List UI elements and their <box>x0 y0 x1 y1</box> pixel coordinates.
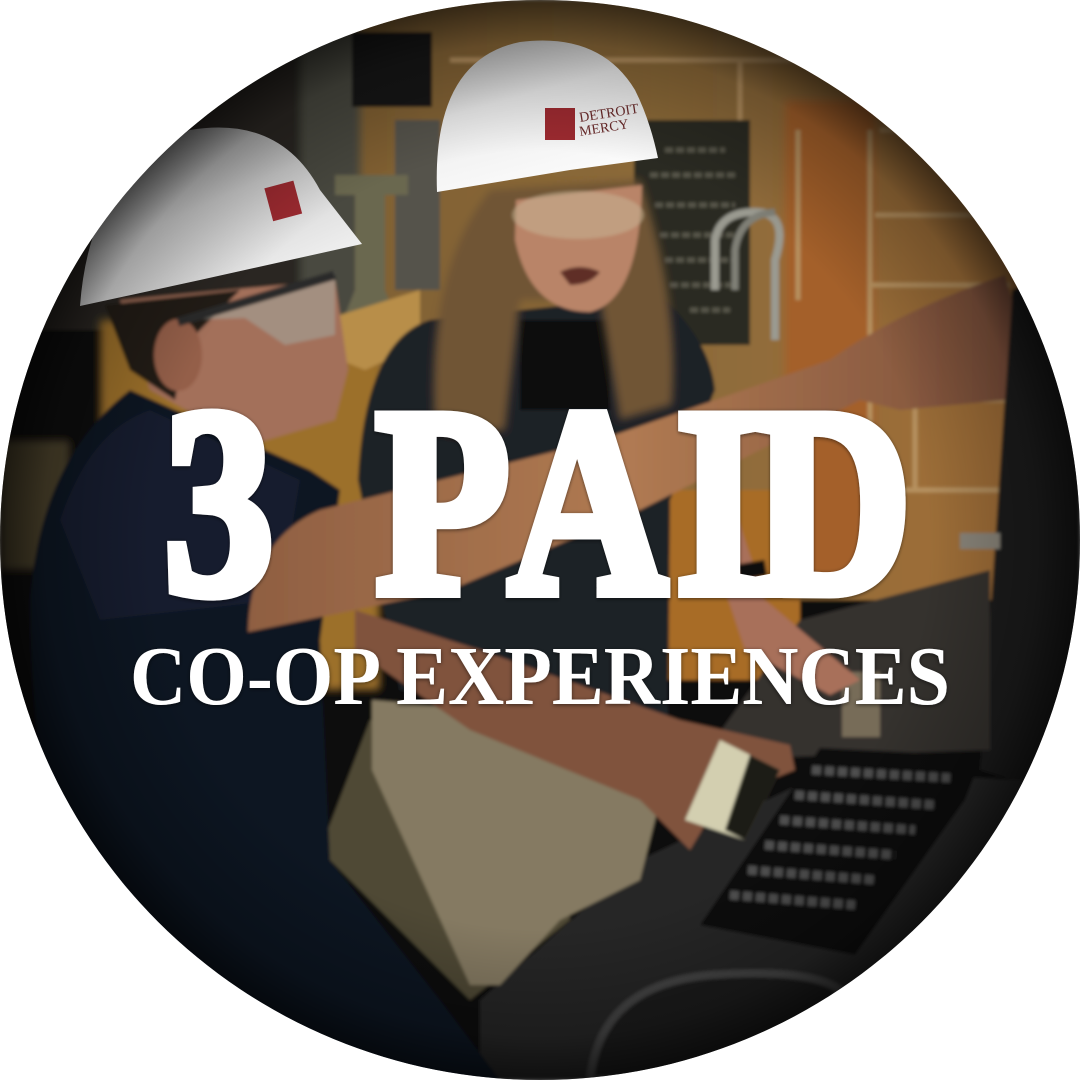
logo: Detroit Mercy: MERCY <box>578 117 630 140</box>
photo: right monitor and desk <box>480 260 1080 1080</box>
subheading: CO-OP EXPERIENCES: CO-OP EXPERIENCES <box>130 630 950 723</box>
person: male student <box>30 272 500 1080</box>
icon: tape measure in hand <box>685 740 780 840</box>
person: woman student <box>320 180 860 1000</box>
logo: Detroit Mercy: DETROIT <box>578 102 640 126</box>
icon: man's white hard hat <box>80 128 362 306</box>
plaque <box>634 120 750 345</box>
icon: keyboard <box>700 748 982 955</box>
person: outstretched arm pointing <box>248 275 1012 850</box>
icon: woman's white hard hat <box>437 41 658 192</box>
headline: 3 PAID: 3 PAID <box>164 355 911 651</box>
logo: Detroit Mercy <box>545 102 640 140</box>
